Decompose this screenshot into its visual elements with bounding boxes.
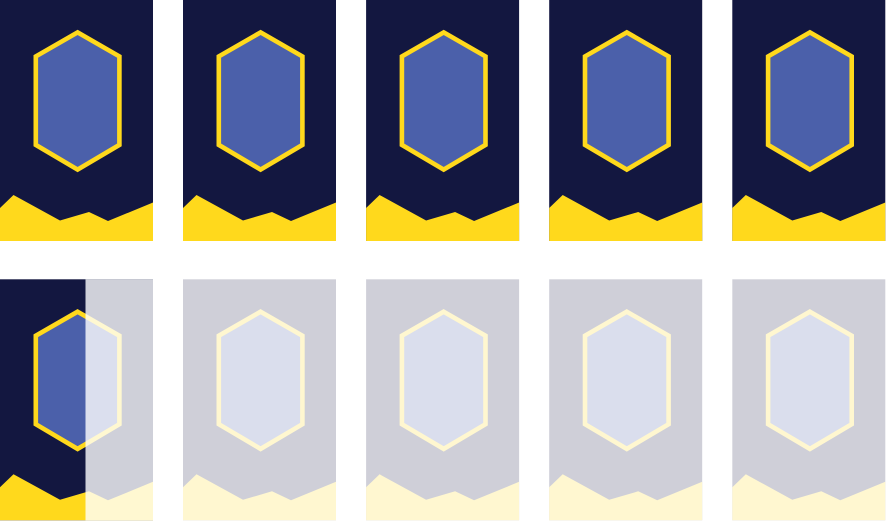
card: row 2 column 2, faded [183,279,336,520]
card: row 2 column 5, faded [732,279,885,520]
card: row 1 column 2 [183,0,336,241]
card: row 1 column 5 [732,0,885,241]
card: row 1 column 4 [549,0,702,241]
card: row 2 column 1, partly faded [0,279,153,520]
card: row 2 column 4, faded [549,279,702,520]
card: row 2 column 3, faded [366,279,519,520]
card: row 1 column 3 [366,0,519,241]
card: row 1 column 1 [0,0,153,241]
